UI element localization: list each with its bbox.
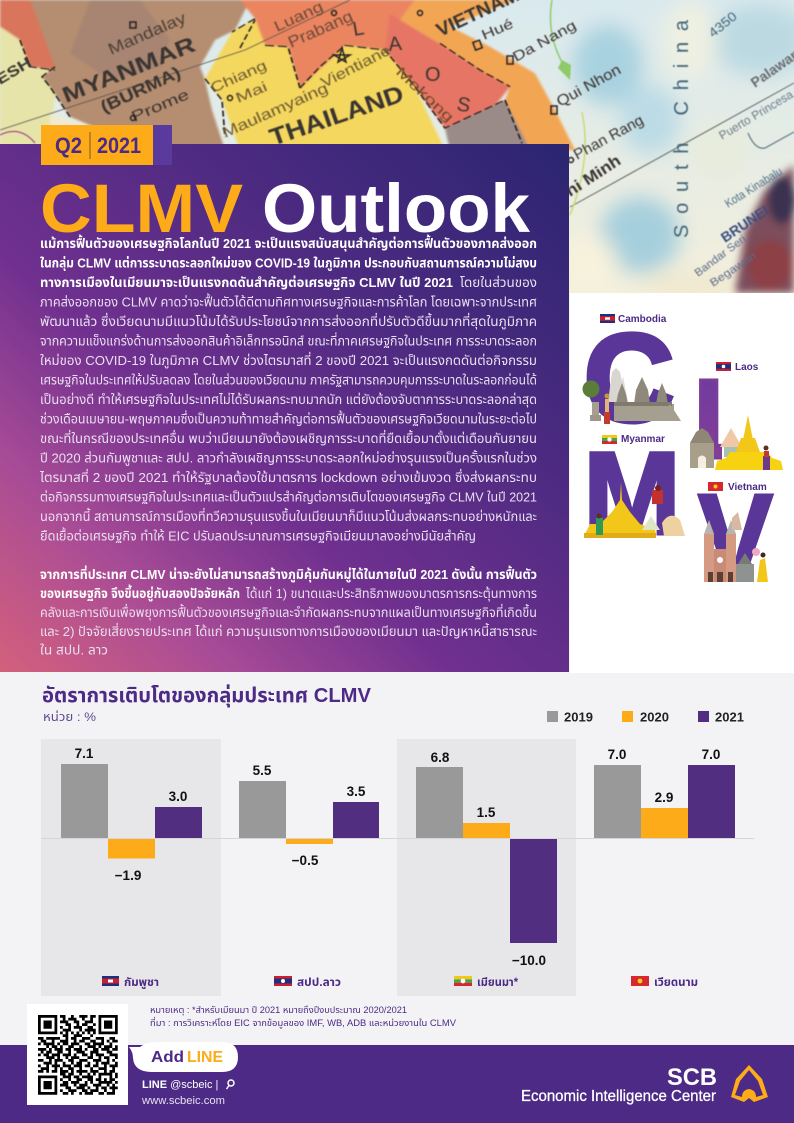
body paragraph 2: ใน สปป. ลาว xyxy=(40,642,108,658)
background map photo: THAILAND xyxy=(266,81,407,152)
body paragraph 2: คลังและการเงินเพื่อพยุงการฟื้นตัวของเศรษฐกิจและจำกัดผลกระทบจากแผลเป็นทางเศรษฐกิจที่เกิดขึ้น xyxy=(40,603,537,620)
body paragraph 2: และ 2) ปัจจัยเสี่ยงรายประเทศ ได้แก่ ความรุนแรงทางการเมืองของเมียนมา และปัญหาหนี้สาธารณะ xyxy=(40,622,537,639)
background map photo: Bandar Seri xyxy=(693,233,749,279)
letter V: V xyxy=(698,468,773,604)
illustration: Angkor Wat xyxy=(582,368,681,424)
panel: Myanmar band xyxy=(397,739,576,996)
body paragraph 1: เป็นอย่างดี ทำให้เศรษฐกิจในประเทศไม่ได้รับผลกระทบมากนัก แต่ยังต้องจับตาการระบาดระลอกล่าสุด xyxy=(40,392,537,407)
country M: Myanmar xyxy=(583,428,685,560)
title: CLMV xyxy=(40,170,243,247)
background map photo: Maulamyaing xyxy=(220,80,331,142)
bars: Myanmar: 6.8 xyxy=(431,750,450,765)
unit label: หน่วย : % xyxy=(43,710,96,724)
illustration: That Luang and Patuxai xyxy=(690,415,783,470)
body paragraph 1: ไตรมาสที่ 2 ของปี 2021 ทำให้รัฐบาลต้องใช้มาตรการ lockdown อย่างเข้มงวด ซึ่งส่งผลกระทบ xyxy=(39,468,537,485)
background map photo: Luang xyxy=(272,0,326,36)
letter L: L xyxy=(693,356,762,482)
background map photo xyxy=(0,0,794,299)
background map photo: O xyxy=(425,64,441,86)
body paragraph 2 xyxy=(40,565,537,658)
title: Outlook xyxy=(262,170,531,247)
label: Cambodia: Cambodia xyxy=(618,314,667,325)
LINE id: LINE @scbeic | xyxy=(142,1079,218,1091)
SCB wordmark: Economic Intelligence Center xyxy=(521,1088,717,1105)
zero axis xyxy=(41,838,754,839)
bars: Vietnam: 2.9 xyxy=(655,790,673,805)
background map photo: 4350 xyxy=(705,9,740,40)
website: www.scbeic.com xyxy=(141,1095,225,1107)
country label: Myanmar: เมียนมา* xyxy=(477,976,518,989)
bars: Vietnam: 7.0 xyxy=(608,747,626,762)
bars: Laos xyxy=(239,763,379,868)
bars: Vietnam: 7.0 xyxy=(702,747,720,762)
background map photo: Mandalay xyxy=(106,10,189,59)
Add LINE callout: Add xyxy=(151,1049,184,1066)
body paragraph 2: จากการที่ประเทศ CLMV น่าจะยังไม่สามารถสร้างภูมิคุ้มกันหมู่ได้ในภายในปี 2021 ดังนั้น การฟื้นตัว xyxy=(40,565,537,583)
SCB wordmark: SCB xyxy=(667,1064,717,1091)
country label: Vietnam xyxy=(631,976,698,989)
body paragraph 1: ในกลุ่ม CLMV แต่การระบาดระลอกใหม่ของ COVID-19 ในภูมิภาค ประกอบกับสถานการณ์ความไม่สงบ xyxy=(40,256,537,272)
body paragraph 1 xyxy=(39,234,537,544)
bars: Cambodia: −1.9 xyxy=(115,868,141,883)
body paragraph 1: ยืดเยื้อต่อเศรษฐกิจ ทำให้ EIC ปรับลดประมาณการเศรษฐกิจเมียนมาลงอย่างมีนัยสำคัญ xyxy=(40,526,476,544)
bars: Myanmar: −10.0 xyxy=(512,953,546,968)
background map photo: Chiang xyxy=(208,57,269,96)
chart title: อัตราการเติบโตของกลุ่มประเทศ CLMV xyxy=(42,685,372,707)
SCB wordmark xyxy=(521,1064,717,1105)
background map photo: Hué xyxy=(479,15,516,43)
flag: Myanmar xyxy=(602,435,617,444)
body paragraph 1: ใหม่ของ COVID-19 ในภูมิภาค CLMV ช่วงไตรมาสที่ 2 ของปี 2021 จะเป็นแรงกดดันต่อกิจกรรม xyxy=(40,351,537,368)
illustration: Shwedagon pagoda xyxy=(584,482,685,538)
footnotes xyxy=(150,1005,456,1029)
flag: Laos xyxy=(716,362,731,371)
background map photo: Kota Kinabalu xyxy=(722,164,785,211)
background map photo: Mekong xyxy=(393,63,457,125)
background map photo: A xyxy=(388,33,403,56)
icon: search xyxy=(226,1080,234,1089)
body paragraph 1: พัฒนาแล้ว ซึ่งเวียดนามมีแนวโน้มได้รับประโยชน์จากการส่งออกที่ปรับตัวดีขึ้นมากที่สุดในภูมิภาค xyxy=(40,312,537,329)
flag: Vietnam xyxy=(708,482,723,491)
country label: Cambodia: กัมพูชา xyxy=(124,976,159,990)
background map photo: Prabang xyxy=(286,8,356,52)
bars: Myanmar: 1.5 xyxy=(477,805,496,820)
label: Myanmar: Myanmar xyxy=(621,434,665,445)
issue badge: 2021 xyxy=(97,133,141,158)
body paragraph 1: จากความแข็งแกร่งด้านการส่งออกสินค้าอิเล็กทรอนิกส์ ขณะที่ภาคเศรษฐกิจในประเทศ การระบาดระลอก xyxy=(40,332,537,348)
country label: Cambodia xyxy=(102,976,159,990)
body paragraph 2: ได้แก่ 1) ขนาดและประสิทธิภาพของมาตรการกระตุ้นทางการ xyxy=(245,586,537,601)
body paragraph 1: โดยในส่วนของ xyxy=(460,275,537,290)
body paragraph 1: แม้การฟื้นตัวของเศรษฐกิจโลกในปี 2021 จะเป็นแรงสนับสนุนสำคัญต่อการฟื้นตัวของภาคส่งออก xyxy=(40,234,537,251)
illustration: Saigon cathedral xyxy=(704,512,768,582)
country L: Laos xyxy=(690,362,783,470)
title xyxy=(40,170,531,247)
issue badge xyxy=(41,125,172,165)
background map photo: Phan Rang xyxy=(571,112,647,164)
background map photo: Prome xyxy=(129,86,192,126)
country label: Laos: สปป.ลาว xyxy=(297,977,341,989)
Add LINE callout: LINE xyxy=(187,1049,223,1066)
background map photo: Da Nang xyxy=(510,17,579,65)
country label: Laos xyxy=(274,976,341,989)
background map photo: L xyxy=(351,17,366,41)
flag: Cambodia xyxy=(600,314,615,323)
background map photo: Mai xyxy=(233,78,270,106)
bars: Laos: −0.5 xyxy=(292,853,319,868)
text panel xyxy=(0,125,569,672)
body paragraph 1: ปี 2020 ส่วนกัมพูชาและ สปป. ลาวกำลังเผชิญการระบาดระลอกใหม่อย่างรุนแรงเป็นครั้งแรกในช่วง xyxy=(40,449,537,466)
Add LINE callout xyxy=(129,1042,238,1072)
legend: 2020 xyxy=(640,710,669,724)
body paragraph 1: ช่วงเดือนเมษายน-พฤษภาคมซึ่งเป็นความท้าทายสำคัญต่อการฟื้นตัวของเศรษฐกิจเวียดนามในระยะต่อไป xyxy=(40,410,537,426)
background map photo: S xyxy=(455,93,472,117)
bars: Laos: 5.5 xyxy=(253,763,272,778)
body paragraph 1: ทางการเมืองในเมียนมาจะเป็นแรงกดดันสำคัญต่อเศรษฐกิจ CLMV ในปี 2021 xyxy=(40,275,453,290)
letter C: C xyxy=(584,310,674,448)
panel: Cambodia band xyxy=(41,739,221,996)
right illustration panel xyxy=(570,293,794,673)
bars: Cambodia xyxy=(61,746,202,883)
bars: Laos: 3.5 xyxy=(347,784,366,799)
legend: 2021 xyxy=(715,710,744,724)
label: Vietnam: Vietnam xyxy=(728,482,767,493)
background map photo: Qui Nhon xyxy=(554,61,624,110)
footnotes: ที่มา : การวิเคราะห์โดย EIC จากข้อมูลของ IMF, WB, ADB และหน่วยงานใน CLMV xyxy=(150,1016,456,1029)
letter M: M xyxy=(583,428,681,560)
legend: 2019 xyxy=(564,710,593,724)
legend xyxy=(547,710,744,724)
background map photo: Begawan xyxy=(708,250,759,289)
footer band xyxy=(0,1045,794,1123)
bars: Vietnam xyxy=(594,747,735,838)
icon: SCB logo xyxy=(731,1065,768,1102)
bars: Cambodia: 7.1 xyxy=(75,746,94,761)
bars: Cambodia: 3.0 xyxy=(169,789,187,804)
background map photo: hi Minh xyxy=(563,152,624,200)
body paragraph 1: เศรษฐกิจในประเทศให้ปรับลดลง โดยในส่วนของเวียดนาม ภาครัฐสามารถควบคุมการระบาดในระลอกก่อนได้ xyxy=(40,372,537,388)
country V: Vietnam xyxy=(698,468,773,604)
body paragraph 2: ของเศรษฐกิจ จึงขึ้นอยู่กับสองปัจจัยหลัก xyxy=(40,584,240,602)
background map photo: South China xyxy=(671,19,693,238)
background map photo: (BURMA) xyxy=(98,63,184,117)
country label: Myanmar xyxy=(454,976,518,989)
country label: Vietnam: เวียดนาม xyxy=(654,976,698,989)
body paragraph 1: ภาคส่งออกของ CLMV คาดว่าจะฟื้นตัวได้ดีตามทิศทางเศรษฐกิจและการค้าโลก โดยเฉพาะจากประเทศ xyxy=(40,292,537,310)
label: Laos: Laos xyxy=(735,362,759,373)
issue badge: Q2 xyxy=(55,133,82,158)
bars: Myanmar xyxy=(416,750,557,968)
panel background gradient xyxy=(0,144,569,672)
body paragraph 1: นอกจากนี้ สถานการณ์การเมืองที่ทวีความรุนแรงขึ้นในเมียนมาก็มีแนวโน้มส่งผลกระทบอย่างหนักและ xyxy=(40,507,537,524)
background map photo: Vientiane xyxy=(318,42,394,92)
body paragraph 1: ต่อกิจกรรมทางเศรษฐกิจในประเทศและเป็นตัวแปรสำคัญต่อการเติบโตของเศรษฐกิจ CLMV ในปี 2021 xyxy=(40,490,537,504)
footnotes: หมายเหตุ : *สำหรับเมียนมา ปี 2021 หมายถึงปีงบประมาณ 2020/2021 xyxy=(150,1005,407,1015)
background map photo: BRUNEI xyxy=(718,202,771,245)
QR code xyxy=(27,1004,128,1105)
background map photo: MYANMAR xyxy=(59,32,199,108)
chart section xyxy=(41,685,754,996)
country C: Cambodia xyxy=(582,310,681,448)
body paragraph 1: ขณะที่ในกรณีของประเทศอื่น พบว่าเมียนมายังต้องเผชิญการระบาดที่ยืดเยื้อมาตั้งแต่เดือนกันยายน xyxy=(40,429,537,446)
